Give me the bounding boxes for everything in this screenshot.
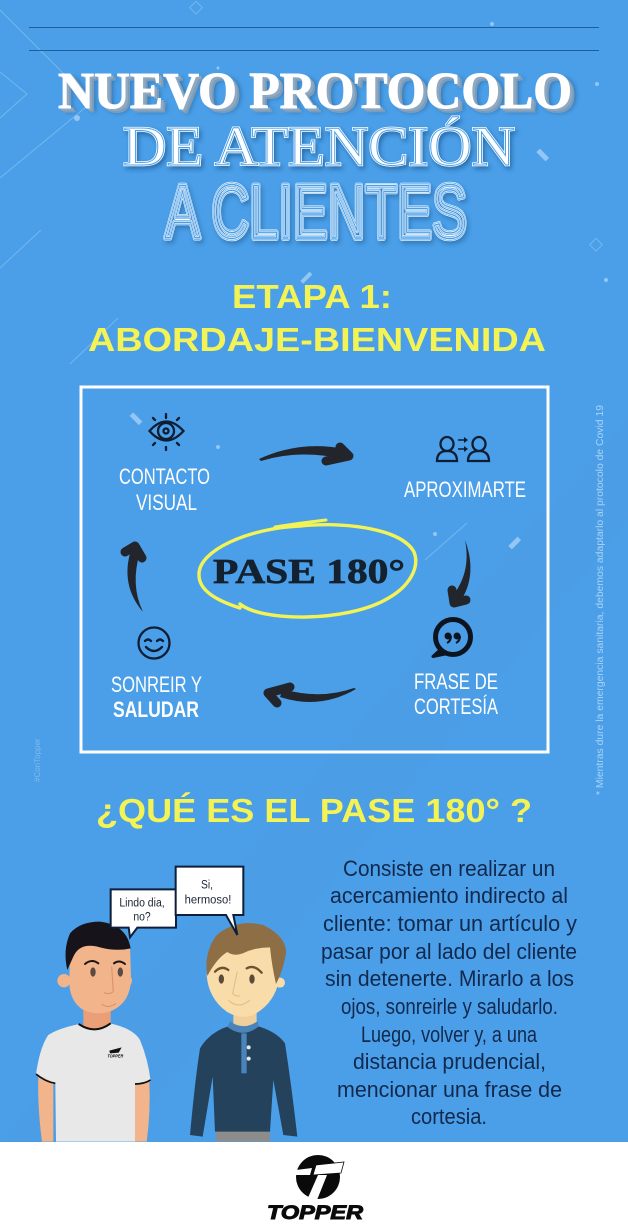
text block: explanation: mencionar una frase de <box>337 1077 562 1102</box>
highlight: pase 180: PASE 180° <box>213 552 405 591</box>
heading: que es el pase: ¿QUÉ ES EL PASE 180° ? <box>96 792 532 829</box>
shirt logo <box>107 1047 124 1058</box>
arrow: to frase <box>449 540 470 606</box>
panel: pase 180 cycle <box>81 387 548 752</box>
title line 3: A CLIENTES <box>165 170 467 255</box>
title <box>58 63 578 258</box>
label: frase de cortesía: CORTESÍA <box>414 694 498 719</box>
text block: explanation: acercamiento indirecto al <box>330 883 568 908</box>
speech bubble: lindo dia <box>111 889 176 937</box>
title line 3 <box>165 170 469 258</box>
label: sonreir y saludar <box>111 672 202 722</box>
speech bubble: si hermoso <box>176 867 243 935</box>
highlight: pase 180 <box>199 520 416 617</box>
title line 3: A CLIENTES <box>167 173 469 258</box>
text block: explanation: pasar por al lado del cliente <box>321 939 577 964</box>
text block: explanation: sin detenerte. Mirarlo a los <box>325 966 574 991</box>
label: aproximarte: APROXIMARTE <box>404 477 526 502</box>
man in navy shirt <box>190 923 297 1142</box>
yellow hand-drawn ellipse <box>199 520 416 617</box>
title line 2: DE ATENCIÓN <box>123 115 515 178</box>
title line 1: NUEVO PROTOCOLO <box>64 67 578 124</box>
text block: explanation: Consiste en realizar un <box>343 856 555 881</box>
text block: explanation <box>321 856 577 1129</box>
title line 3: A CLIENTES <box>165 170 467 255</box>
title line 3: A CLIENTES <box>165 170 467 255</box>
label: contacto visual <box>119 464 210 515</box>
label: sonreir y saludar: SONREIR Y <box>111 672 202 697</box>
speech bubble: si hermoso: hermoso! <box>185 892 231 906</box>
title line 1: NUEVO PROTOCOLO <box>58 63 572 120</box>
top rule lines <box>29 28 599 50</box>
title line 1: NUEVO PROTOCOLO <box>60 65 574 122</box>
label: contacto visual: VISUAL <box>136 490 197 515</box>
icon: eye <box>150 414 184 450</box>
label: frase de cortesía <box>414 669 498 719</box>
stage heading: ETAPA 1: <box>232 278 392 315</box>
speech bubble: lindo dia: Lindo dia, <box>119 896 165 910</box>
side note: * Mientras dure la emergencia sanitaria, debemos adaptarlo al protocolo de Covid 19 <box>595 405 606 795</box>
arrow: to contacto <box>125 546 143 612</box>
shirt logo: TOPPER <box>107 1053 124 1058</box>
title line 2: DE ATENCIÓN <box>125 118 517 181</box>
icon: quote bubble <box>433 620 470 656</box>
text block: explanation: cortesia. <box>411 1104 487 1129</box>
text block: explanation: cliente: tomar un artículo y <box>323 911 577 936</box>
icon: people exchange <box>437 437 489 461</box>
logo: topper: TOPPER <box>267 1203 363 1224</box>
illustration: two men talking <box>36 867 297 1142</box>
icon: smile <box>138 628 170 658</box>
footer band <box>0 1142 628 1231</box>
arrow: to sonreir <box>268 687 356 703</box>
hashtag watermark: #ConTopper <box>33 738 42 782</box>
stage heading <box>88 278 546 358</box>
text block: explanation: distancia prudencial, <box>353 1049 546 1074</box>
speech bubble: lindo dia: no? <box>133 910 151 924</box>
title line 3: A CLIENTES <box>165 170 467 255</box>
label: frase de cortesía: FRASE DE <box>414 669 498 694</box>
text block: explanation: Luego, volver y, a una <box>361 1022 538 1047</box>
logo: topper <box>267 1155 363 1224</box>
label: sonreir y saludar: SALUDAR <box>113 697 199 722</box>
speech bubble: si hermoso: Si, <box>201 878 213 892</box>
stage heading: ABORDAJE-BIENVENIDA <box>88 321 546 358</box>
title line 1: NUEVO PROTOCOLO <box>62 67 576 124</box>
man in white shirt <box>36 922 151 1142</box>
title line 2: DE ATENCIÓN <box>123 115 515 178</box>
arrow: to aproximarte <box>259 446 349 461</box>
text block: explanation: ojos, sonreirle y saludarlo. <box>341 994 558 1019</box>
label: contacto visual: CONTACTO <box>119 464 210 489</box>
